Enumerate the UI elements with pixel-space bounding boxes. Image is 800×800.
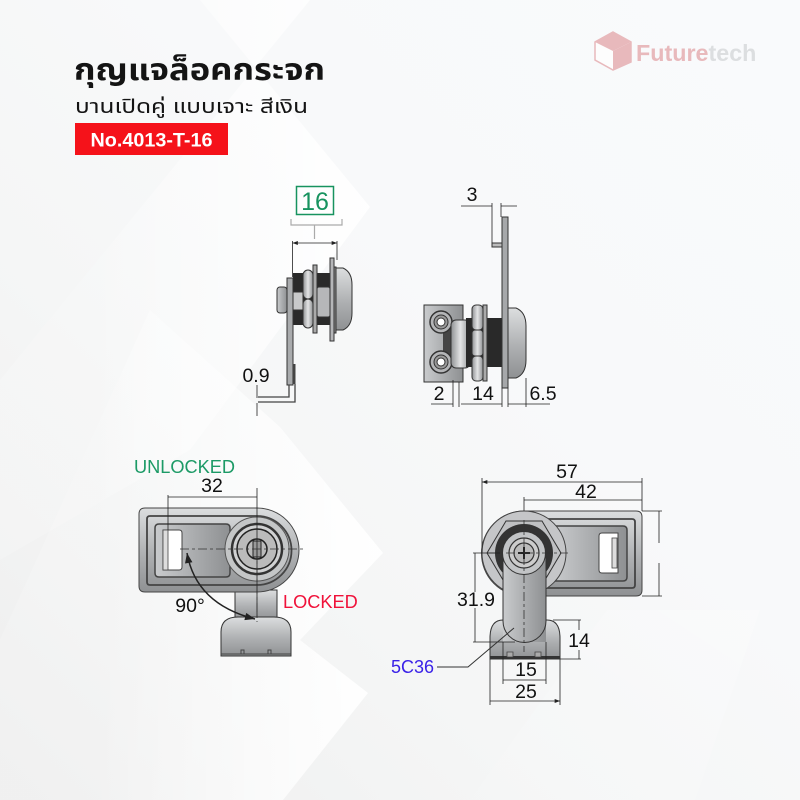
dimension: 42: 42 [575, 481, 597, 503]
drawing: locked / unlocked back view [134, 457, 358, 656]
label: 90 degrees: 90° [175, 595, 205, 617]
dimension: 15: 15 [515, 659, 537, 681]
dimension: 14: 14 [568, 630, 590, 652]
model number badge [75, 123, 228, 155]
model number badge: No.4013-T-16 [90, 130, 213, 152]
drawing: front view with dimensions 3, 2, 14, 6.5 [424, 184, 557, 407]
subtitle: บานเปิดคู่ แบบเจาะ สีเงิน [75, 95, 308, 119]
dimension: 0.9: 0.9 [242, 365, 270, 387]
logo: Futuretech [595, 32, 756, 70]
dimension: 57: 57 [556, 461, 578, 483]
dimension: 31.9: 31.9 [457, 589, 495, 611]
dimension: 3: 3 [467, 184, 477, 206]
callout: 5C36: 5C36 [391, 657, 434, 677]
dimension: 6.5: 6.5 [529, 383, 557, 405]
dimension: 25: 25 [515, 681, 537, 703]
dimension: 14: 14 [472, 383, 494, 405]
title: กุญแจล็อคกระจก [74, 53, 325, 88]
callout: 5C36 [391, 628, 514, 677]
drawing: locked front view with dimensions [391, 461, 662, 705]
logo: Futuretech: Futuretech [636, 40, 756, 66]
drawing: side view with 16 dimension [242, 186, 352, 416]
label: unlocked: UNLOCKED [134, 457, 235, 477]
dimension box: 16: 16 [301, 188, 329, 216]
dimension: 2: 2 [434, 383, 444, 405]
label: locked: LOCKED [283, 592, 358, 612]
dimension: 32: 32 [201, 475, 223, 497]
